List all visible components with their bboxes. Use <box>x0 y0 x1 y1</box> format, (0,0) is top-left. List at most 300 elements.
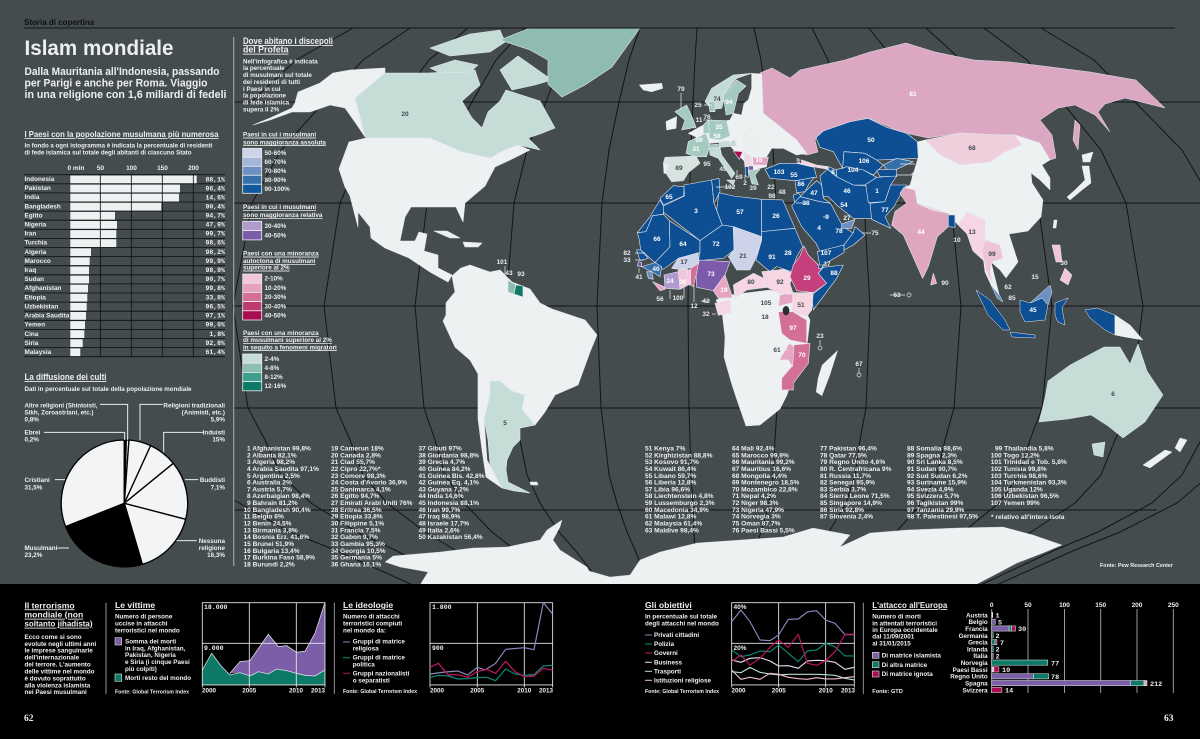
panel: targets: Business <box>654 659 682 666</box>
chart: Europe deaths bars: 2 <box>996 654 1000 662</box>
chart: Europe deaths bars: Svizzera <box>962 687 988 694</box>
list: countries 51-63: 55 Libano 59,7% <box>645 473 696 480</box>
panel: ideologies: Gruppi nazionalisti <box>353 670 410 677</box>
list: countries 51-63: 61 Malawi 12,8% <box>645 514 696 521</box>
panel: religions pie chart: Ebrei <box>24 430 40 436</box>
panel: religions pie chart: Nessuna <box>199 538 225 545</box>
list: countries 77-87: 83 Serbia 3,7% <box>820 486 866 493</box>
panel: ideologies: Gruppi di matrice <box>353 639 405 646</box>
list: countries 77-87: 77 Pakistan 96,4% <box>820 446 877 452</box>
panel: victims: Numero di persone <box>115 613 173 620</box>
panel: population bar chart: 96,5% <box>205 304 225 310</box>
panel: religions pie chart: Dati in percentuale sul totale della popolazione mondiale <box>24 386 192 393</box>
panel: victims: Le vittime <box>115 600 155 610</box>
map: country numbers: 65 <box>665 194 673 201</box>
panel: attacks in Europe: in Europa occidentale <box>872 627 938 634</box>
panel: map legend: di musulmani sul totale <box>243 72 312 79</box>
list: countries 88-98: 88 Somalia 98,6% <box>907 446 962 452</box>
panel: terrorism intro: nei Paesi musulmani <box>24 689 87 696</box>
list: countries 1-18: 11 Belgio 6% <box>244 514 284 521</box>
list: countries 77-87: 87 Slovenia 2,4% <box>820 514 873 521</box>
chart: victims area: 18.000 <box>204 604 228 611</box>
panel: religions pie chart: Induisti <box>203 430 225 436</box>
list: countries 51-63: 58 Liechtenstein 4,8% <box>645 493 714 500</box>
map: country numbers: 15 <box>1031 274 1039 281</box>
list: countries 64-76: 66 Mauritania 99,2% <box>732 459 795 466</box>
panel: map legend: Paesi in cui i musulmani <box>243 132 316 139</box>
map: country numbers: 12 <box>690 303 698 310</box>
chart: ideologies lines: 2013 <box>539 688 553 695</box>
panel: map legend: sono maggioranza assoluta <box>243 139 326 146</box>
list: countries 19-36: 29 Etiopia 33,8% <box>331 514 383 521</box>
list: countries 77-87: 84 Sierra Leone 71,5% <box>820 493 890 500</box>
panel: map legend: supera il 2% <box>243 106 280 113</box>
map: country numbers: 38 <box>802 200 810 207</box>
map: country numbers: 13 <box>968 229 976 236</box>
chart: Europe deaths bars: 2 <box>996 633 1000 641</box>
map: country numbers: 88 <box>830 270 838 277</box>
list: countries 64-76: 65 Marocco 99,9% <box>732 452 789 459</box>
panel: population bar chart: Afghanistan <box>24 285 62 292</box>
panel: ideologies: Gruppi di matrice <box>353 654 405 661</box>
chart: Europe deaths bars: Belgio <box>968 619 988 626</box>
panel: ideologies: Le ideologie <box>343 600 393 610</box>
panel: terrorism intro: Il terrorismo <box>24 600 75 610</box>
list: countries 51-63: 59 Lussemburgo 2,3% <box>645 500 715 507</box>
list: countries 51-63: 54 Kuwait 86,4% <box>645 466 696 473</box>
panel: map legend: Paesi con una minoranza <box>243 330 319 337</box>
map: country numbers: 16 <box>755 157 763 164</box>
panel: ideologies: Fonte: Global Terrorism Index <box>343 689 418 695</box>
map: country numbers: 54 <box>840 202 848 209</box>
panel: victims: e Siria (i cinque Paesi <box>125 659 190 666</box>
panel: map legend: Nell'infografica è indicata <box>243 58 318 65</box>
panel: attacks in Europe: Di altra matrice <box>882 662 928 669</box>
panel: population bar chart: Iran <box>24 230 36 238</box>
chart: targets lines: 2005 <box>772 688 786 695</box>
list: countries 99-107: 106 Uzbekistan 96,5% <box>991 493 1059 500</box>
map: country numbers: 23 <box>816 333 824 340</box>
panel: attacks in Europe: Numero di morti <box>872 613 921 620</box>
map: country numbers: 68 <box>968 145 976 152</box>
map: country numbers: 51 <box>797 302 805 309</box>
panel: map legend: 8-12% <box>264 374 283 381</box>
panel: religions pie chart: Cristiani <box>24 477 50 484</box>
map: country numbers: 64 <box>679 241 687 248</box>
panel: religions pie chart: 7,1% <box>211 484 225 492</box>
map: Antarctica <box>385 520 1062 585</box>
list: countries 77-87: 79 Regno Unito 4,6% <box>820 459 885 466</box>
panel: population bar chart: 1,8% <box>209 331 225 338</box>
map: country numbers: 19 <box>720 287 728 294</box>
map: country numbers: 50 <box>867 137 875 144</box>
list: countries 88-98: 94 Svezia 4,9% <box>907 486 954 493</box>
source: Pew: Fonte: Pew Research Center <box>1100 563 1174 569</box>
chart: targets lines: 40% <box>734 604 747 611</box>
map: country numbers: 34 <box>794 158 802 165</box>
panel: population bar chart: Egitto <box>24 212 43 220</box>
panel: population bar chart: India <box>24 194 40 201</box>
map: country numbers: 35 <box>715 124 723 131</box>
list: countries 99-107: 107 Yemen 99% <box>991 500 1040 507</box>
map: country numbers: 80 <box>747 279 755 286</box>
map: country numbers: 101 <box>497 259 508 266</box>
chart: targets lines: 2000 <box>732 688 746 695</box>
map: country numbers: 79 <box>677 86 685 93</box>
map: country numbers: 61 <box>773 347 781 354</box>
panel: map legend: di musulmani superiore al 2% <box>243 337 332 344</box>
panel: ideologies: nel mondo da: <box>343 627 386 634</box>
list: countries 1-18: 8 Azerbaigian 98,4% <box>247 493 310 500</box>
list: countries 19-36: 36 Ghana 16,1% <box>331 561 381 568</box>
chart: Europe deaths bars: 77 <box>1051 660 1059 668</box>
map: country numbers: 58 <box>713 133 721 140</box>
map: country numbers: 71 <box>930 192 938 199</box>
panel: map legend: i Paesi in cui <box>243 86 281 93</box>
panel: population bar chart: Pakistan <box>24 185 51 192</box>
list: countries 37-50: 39 Grecia 4,7% <box>418 459 465 466</box>
chart: Europe deaths bars: Francia <box>965 626 988 633</box>
panel: population bar chart: 96,4% <box>205 186 225 192</box>
panel: map legend: del Profeta <box>243 45 289 55</box>
panel: population bar chart: 47,9% <box>205 222 225 228</box>
map: country numbers: 1 <box>875 188 879 195</box>
panel: population bar chart: di fede islamica sul totale degli abitanti di ciascuno Stato <box>24 150 192 156</box>
map: country numbers: 95 <box>703 161 711 168</box>
panel: population bar chart: 90,7% <box>205 276 225 283</box>
panel: ideologies: religiosa <box>353 646 379 653</box>
list: countries 19-36: 34 Georgia 10,5% <box>331 548 386 555</box>
map: country numbers: 26 <box>772 213 780 220</box>
list: countries 88-98: 93 Suriname 15,9% <box>907 480 967 487</box>
panel: map legend: 50-60% <box>264 150 287 157</box>
footnote: * relativo all'intera isola <box>991 514 1065 521</box>
panel: religions pie chart: Musulmani <box>24 545 58 552</box>
panel: map legend: 30-40% <box>264 223 287 230</box>
panel: population bar chart: 92,8% <box>205 340 225 347</box>
map: country numbers: 100 <box>673 295 684 302</box>
map: country numbers <box>401 86 1115 427</box>
chart: Europe deaths bars: 200 <box>1132 602 1143 609</box>
map: country numbers: 62 <box>1004 284 1012 291</box>
panel: population bar chart: 99,7% <box>205 230 225 238</box>
panel: map legend: la percentuale <box>243 65 285 72</box>
panel: victims: Somma dei morti <box>125 638 176 645</box>
chart: ideologies lines: 2010 <box>517 688 532 695</box>
chart: victims area <box>202 603 325 695</box>
panel: map legend <box>243 36 337 391</box>
map: country numbers: 98 <box>768 193 776 200</box>
chart: victims area: 2000 <box>202 688 217 695</box>
map: country numbers: 97 <box>789 325 797 332</box>
panel: population bar chart: Indonesia <box>24 176 55 183</box>
panel: ideologies: terroristici compiuti <box>343 621 402 628</box>
map: country numbers: 77 <box>881 207 889 214</box>
map: South America <box>443 265 597 493</box>
list: countries 51-63: 63 Maldive 98,4% <box>645 527 699 534</box>
list: countries 64-76: 75 Oman 87,7% <box>732 521 781 528</box>
panel: terrorism intro: alla violenza islamista <box>24 682 91 689</box>
panel: attacks in Europe: L'attacco all'Europa <box>872 600 947 610</box>
panel: population bar chart: I Paesi con la popolazione musulmana più numerosa <box>24 129 219 139</box>
panel: population bar chart: Siria <box>24 340 39 347</box>
panel: map legend: 20-30% <box>264 294 287 301</box>
chart: targets lines <box>732 603 855 695</box>
panel: targets: Trasporti <box>654 668 681 675</box>
panel: attacks in Europe: Fonte: GTD <box>872 689 903 695</box>
panel: map legend: 60-70% <box>264 159 287 166</box>
list: countries 19-36: 28 Eritrea 36,5% <box>331 507 382 514</box>
list: countries 19-36: 27 Emirati Arabi Uniti 76% <box>331 500 413 507</box>
panel: victims <box>115 600 191 695</box>
list: countries 88-98: 97 Tanzania 29,9% <box>907 507 965 514</box>
map: country numbers: 85 <box>1008 295 1016 302</box>
panel: population bar chart: 99,0% <box>205 322 225 328</box>
panel: map legend: autoctona di musulmani <box>243 258 316 265</box>
map: country numbers: 66 <box>653 236 661 243</box>
map: country numbers: 21 <box>739 253 747 260</box>
panel: victims: Pakistan, Nigeria <box>125 652 176 659</box>
list: countries 19-36: 25 Danimarca 4,1% <box>331 486 391 493</box>
panel: attacks in Europe: in attentati terroristici <box>872 620 937 627</box>
map: country numbers: 78 <box>835 228 843 235</box>
map: country numbers: 60 <box>755 148 763 155</box>
list: countries 37-50: 42 Guinea Eq. 4,1% <box>418 480 479 487</box>
map: country numbers: 76 <box>703 114 711 121</box>
panel: terrorism intro: soltanto jihadista) <box>24 619 93 629</box>
panel: terrorism intro: Ecco come si sono <box>24 634 82 641</box>
list: countries 19-36: 24 Costa d'Avorio 36,9% <box>331 480 407 487</box>
map: country numbers: 55 <box>790 172 798 179</box>
panel: map legend: Dove abitano i discepoli <box>243 36 333 46</box>
list: countries 99-107: 104 Turkmenistan 93,3% <box>991 480 1067 487</box>
list: countries 19-36: 22 Cipro 22,7%* <box>331 466 381 473</box>
map: country numbers: 20 <box>401 111 409 118</box>
chart: Europe deaths bars: 7 <box>1000 640 1004 648</box>
map: country numbers: 67 <box>855 361 863 368</box>
panel: population bar chart: 99,8% <box>205 285 225 292</box>
chart: Europe deaths bars: 30 <box>1018 626 1026 634</box>
panel: population bar chart: 88,1% <box>205 176 225 184</box>
panel: population bar chart: In fondo a ogni istogramma è indicata la percentuale di residenti <box>24 142 213 150</box>
map: country numbers: 102 <box>725 184 736 191</box>
panel: targets: Gli obiettivi <box>645 600 692 610</box>
map: country numbers: 104 <box>848 167 859 174</box>
map: country numbers: 31 <box>692 146 700 153</box>
map: leader ticks <box>505 93 933 373</box>
list: countries 99-107: 102 Tunisia 99,8% <box>991 466 1047 473</box>
panel: population bar chart: Sudan <box>24 276 44 283</box>
map: North America <box>253 28 640 282</box>
panel: religions pie chart: Religioni tradizionali <box>163 402 225 410</box>
map: country numbers: 30 <box>1060 260 1068 267</box>
panel: map legend: 4-8% <box>264 365 280 372</box>
panel: map legend: sono maggioranza relativa <box>243 212 323 219</box>
list: countries 37-50: 44 India 14,6% <box>418 493 464 500</box>
panel: map legend: 2-4% <box>264 356 280 363</box>
chart: targets lines: 20% <box>734 645 747 652</box>
panel: map legend: 70-80% <box>264 168 287 175</box>
map: country numbers: 4 <box>817 225 821 232</box>
list: countries 64-76: 68 Mongolia 4,4% <box>732 473 787 480</box>
chart: Europe deaths bars: 0 <box>990 602 994 609</box>
panel: map legend: Paesi in cui i musulmani <box>243 204 316 211</box>
panel: map legend: superiore al 2% <box>243 265 290 272</box>
list: countries 77-87: 85 Singapore 14,9% <box>820 500 882 507</box>
map: country numbers: 72 <box>712 241 720 248</box>
title: Islam mondiale <box>24 36 174 60</box>
chart: Europe deaths bars: 50 <box>1024 602 1032 609</box>
map: country numbers: 89 <box>675 165 683 172</box>
list: countries 51-63: 62 Malaysia 61,4% <box>645 521 702 528</box>
list: countries 1-18: 18 Burundi 2,2% <box>244 561 295 568</box>
list: countries 77-87: 81 Russia 11,7% <box>820 473 871 480</box>
list: countries 77-87: 82 Senegal 95,9% <box>820 480 875 487</box>
list: countries 1-18: 1 Afghanistan 99,8% <box>247 446 311 452</box>
map: country numbers: 106 <box>859 158 870 165</box>
panel: population bar chart: 200 <box>188 165 199 172</box>
list: countries 19-36: 26 Egitto 94,7% <box>331 493 380 500</box>
map: country numbers: 27 <box>843 215 851 222</box>
panel: ideologies <box>343 600 418 695</box>
map: country numbers: 48 <box>778 189 786 196</box>
map: country numbers: 52 <box>916 161 924 168</box>
bottom band <box>0 584 1200 739</box>
list: countries 1-18: 6 Australia 2% <box>247 480 292 487</box>
panel: terrorism intro: dell'internazionale <box>24 654 80 662</box>
panel: targets: Polizia <box>654 641 674 648</box>
list: countries 1-18: 9 Bahrain 81,2% <box>247 500 298 507</box>
panel: population bar chart: 98,9% <box>205 267 225 274</box>
panel: map legend: in seguito a fenomeni migratori <box>243 344 337 351</box>
map: country numbers: 14 <box>745 127 753 134</box>
panel: population bar chart: Nigeria <box>24 222 47 228</box>
list: countries 51-63: 56 Liberia 12,8% <box>645 480 696 487</box>
list: countries 51-63: 51 Kenya 7% <box>645 446 685 452</box>
panel: population bar chart <box>24 129 225 357</box>
panel: terrorism intro <box>24 600 96 696</box>
subtitle: per Parigi e anche per Roma. Viaggio <box>24 78 208 90</box>
panel: population bar chart: Bangladesh <box>24 204 61 210</box>
list: countries 37-50: 50 Kazakistan 56,4% <box>418 534 483 541</box>
chart: Europe deaths bars: 100 <box>1059 602 1070 609</box>
panel: map legend: 90-100% <box>264 186 290 193</box>
panel: population bar chart: Turchia <box>24 240 48 246</box>
panel: terrorism intro: evolute negli ultimi anni <box>24 641 96 648</box>
map: country numbers: 18 <box>761 314 769 321</box>
panel: map legend: 80-90% <box>264 177 287 184</box>
map: country numbers: 103 <box>774 169 785 176</box>
map: country numbers: 90 <box>941 280 949 287</box>
chart: Europe deaths bars: Germania <box>959 633 988 640</box>
chart: ideologies lines: 1.800 <box>432 604 452 611</box>
map: country numbers: 59 <box>695 137 703 144</box>
map: country numbers: 53 <box>755 140 763 147</box>
list: countries 64-76: 72 Niger 98,3% <box>732 500 779 507</box>
map: country numbers: 70 <box>798 352 806 359</box>
panel: map legend: 12-16% <box>264 383 287 390</box>
panel: religions pie chart: (Animisti, etc.) <box>182 410 225 416</box>
panel: religions pie chart: 16,3% <box>207 552 225 559</box>
map: country numbers: 47 <box>810 190 818 197</box>
chart: ideologies lines: 900 <box>432 645 444 652</box>
map: country numbers: 99 <box>988 251 996 258</box>
map: country numbers: 74 <box>713 96 721 103</box>
list: countries 37-50: 48 Israele 17,7% <box>418 521 469 528</box>
panel: ideologies: o separatisti <box>353 677 390 684</box>
panel: religions pie chart: 23,2% <box>24 552 43 559</box>
chart: Europe deaths bars: 78 <box>1051 674 1059 682</box>
list: countries 1-18: 7 Austria 5,7% <box>247 486 292 493</box>
panel: religions pie chart: 15% <box>212 436 225 444</box>
list: countries 19-36: 31 Francia 7,5% <box>331 527 381 534</box>
panel: population bar chart: Uzbekistan <box>24 304 58 310</box>
panel: population bar chart: 150 <box>157 165 168 172</box>
list: countries 99-107: 100 Togo 12,2% <box>991 452 1040 459</box>
map: country numbers: 10 <box>953 237 961 244</box>
map: country numbers: 75 <box>871 230 879 237</box>
chart: Europe deaths bars: 212 <box>1150 681 1162 689</box>
map: country numbers: 32 <box>702 311 710 318</box>
chart: Europe deaths bars: Spagna <box>965 680 988 688</box>
panel: map legend: di fede islamica <box>243 100 290 106</box>
list: countries 64-76: 64 Mali 92,4% <box>732 446 775 452</box>
header: section name: Storia di copertina <box>24 18 95 27</box>
panel: targets: Istituzioni religiose <box>654 677 712 684</box>
subtitle: in una religione con 1,6 miliardi di fedeli <box>24 89 226 101</box>
list: countries 64-76: 76 Paesi Bassi 5,5% <box>732 527 795 534</box>
chart: Europe deaths bars: 10 <box>1002 667 1010 675</box>
map: country numbers: 87 <box>733 122 741 129</box>
map: country numbers: 37 <box>823 261 831 268</box>
panel: population bar chart: 33,8% <box>205 294 225 302</box>
map: Australia and New Zealand <box>1039 344 1187 468</box>
panel: targets: Governi <box>654 650 678 657</box>
list: countries 1-18: 17 Burkina Faso 58,9% <box>244 555 315 562</box>
map: Russia and Asia <box>760 43 1165 340</box>
chart: victims area: 2013 <box>311 688 325 695</box>
panel: religions pie chart: 5,9% <box>211 416 225 424</box>
panel: attacks in Europe: al 31/01/2015 <box>872 641 911 648</box>
list: countries 51-63: 52 Kirghizistan 88,8% <box>645 452 713 459</box>
map: country numbers: 42 <box>702 298 710 305</box>
map: country numbers: 73 <box>707 271 715 278</box>
list: countries 1-18: 3 Algeria 98,2% <box>247 459 295 466</box>
map: country numbers: 43 <box>505 270 513 277</box>
list: countries 99-107: 101 Trinidad e Tob. 5,8% <box>991 459 1067 466</box>
chart: Europe deaths bars: 14 <box>1005 688 1013 696</box>
map: country numbers: 45 <box>1029 307 1037 314</box>
panel: population bar chart: 14,6% <box>205 194 225 202</box>
list: countries 19-36: 20 Canada 2,8% <box>331 452 381 459</box>
map: country numbers: 107 <box>821 250 832 257</box>
panel: religions pie chart: 0,8% <box>24 416 39 424</box>
panel: victims: uccise in attacchi <box>115 621 168 628</box>
map: country numbers: 9 <box>825 214 829 221</box>
list: countries 64-76: 67 Mauritius 16,6% <box>732 466 791 473</box>
map: country numbers: 36 <box>679 279 687 286</box>
chart: Europe deaths bars: Italia <box>973 653 988 660</box>
map: country numbers: 91 <box>768 254 776 261</box>
panel: population bar chart: 98,6% <box>205 240 225 246</box>
list: countries 1-18: 2 Albania 82,1% <box>247 452 297 459</box>
list: countries 88-98: 90 Sri Lanka 8,5% <box>907 459 963 466</box>
map: country numbers: 96 <box>911 172 919 179</box>
panel: population bar chart: Cina <box>24 331 39 338</box>
map: country numbers: 94 <box>725 99 733 106</box>
chart: targets lines: 2010 <box>819 688 833 695</box>
panel: map legend: la popolazione <box>243 93 287 100</box>
